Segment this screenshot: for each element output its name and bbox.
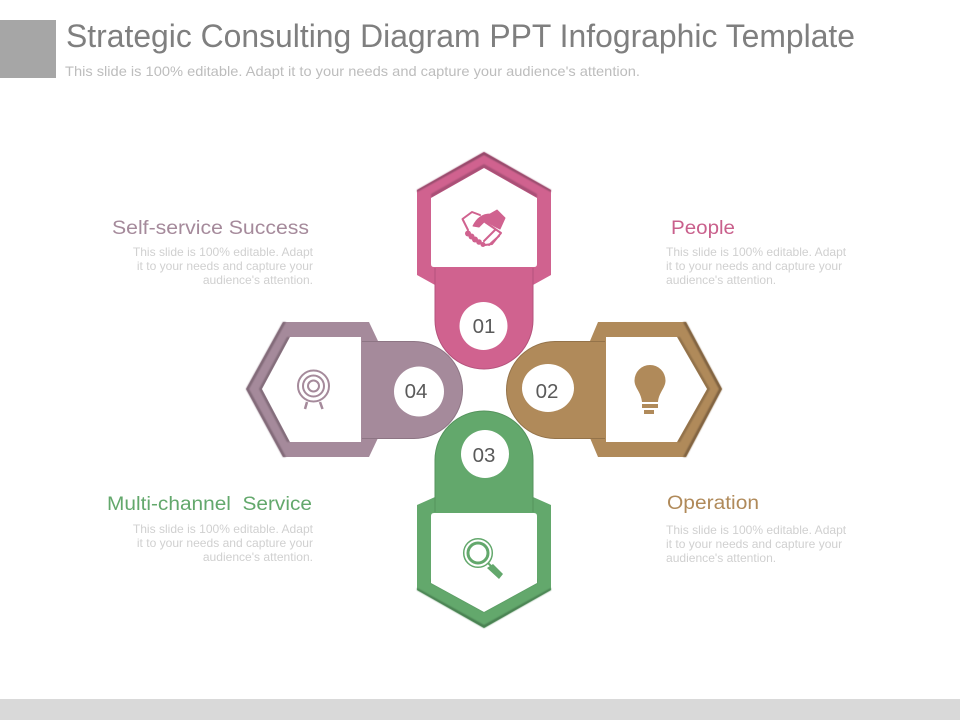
hexagon frame bbox=[417, 497, 551, 628]
hexagon frame bbox=[590, 322, 722, 457]
hexagon frame bbox=[417, 152, 551, 285]
text block: people bbox=[666, 218, 847, 287]
panel: 03 green bbox=[417, 411, 551, 628]
icon: magnifier bbox=[464, 539, 503, 579]
number badge bbox=[460, 302, 508, 350]
text block: self-service success bbox=[112, 218, 314, 287]
subtitle: This slide is 100% editable. Adapt it to your needs and capture your audience's attention. bbox=[65, 63, 640, 79]
number: 01 bbox=[473, 315, 495, 338]
tab bbox=[506, 342, 605, 438]
number badge bbox=[522, 364, 574, 412]
number: 04 bbox=[405, 380, 427, 403]
description: audience's attention. bbox=[666, 273, 776, 287]
description: audience's attention. bbox=[666, 551, 776, 565]
description: This slide is 100% editable. Adapt bbox=[666, 245, 847, 259]
hexagon frame bbox=[246, 322, 378, 457]
description: audience's attention. bbox=[203, 550, 313, 564]
tab bbox=[435, 411, 533, 512]
description: This slide is 100% editable. Adapt bbox=[133, 522, 314, 536]
tab bbox=[362, 342, 462, 438]
description: audience's attention. bbox=[203, 273, 313, 287]
description: it to your needs and capture your bbox=[666, 537, 842, 551]
number: 03 bbox=[473, 444, 495, 467]
description: it to your needs and capture your bbox=[137, 536, 313, 550]
text block: operation bbox=[666, 493, 847, 565]
header square bbox=[0, 20, 56, 78]
number: 02 bbox=[536, 380, 558, 403]
panel: 04 mauve bbox=[246, 322, 462, 457]
number badge bbox=[461, 430, 509, 478]
description: This slide is 100% editable. Adapt bbox=[133, 245, 314, 259]
footer bar bbox=[0, 699, 960, 720]
white inner panel bbox=[431, 513, 537, 612]
panel: 02 orange bbox=[506, 322, 722, 457]
description: it to your needs and capture your bbox=[137, 259, 313, 273]
heading: Operation bbox=[667, 493, 759, 514]
text block: multi-channel service bbox=[107, 494, 314, 564]
title: Strategic Consulting Diagram PPT Infographic Template bbox=[66, 18, 855, 54]
heading: People bbox=[671, 218, 735, 239]
heading: Multi-channel Service bbox=[107, 494, 312, 515]
icon: target bbox=[298, 370, 329, 409]
white inner panel bbox=[606, 337, 707, 442]
white inner panel bbox=[431, 168, 537, 267]
heading: Self-service Success bbox=[112, 218, 309, 239]
description: This slide is 100% editable. Adapt bbox=[666, 523, 847, 537]
icon: light bulb bbox=[634, 365, 666, 414]
white inner panel bbox=[262, 337, 361, 442]
icon: handshake bbox=[462, 210, 505, 247]
panel: 01 pink bbox=[417, 152, 551, 369]
description: it to your needs and capture your bbox=[666, 259, 842, 273]
tab bbox=[435, 268, 533, 369]
number badge bbox=[394, 366, 444, 416]
